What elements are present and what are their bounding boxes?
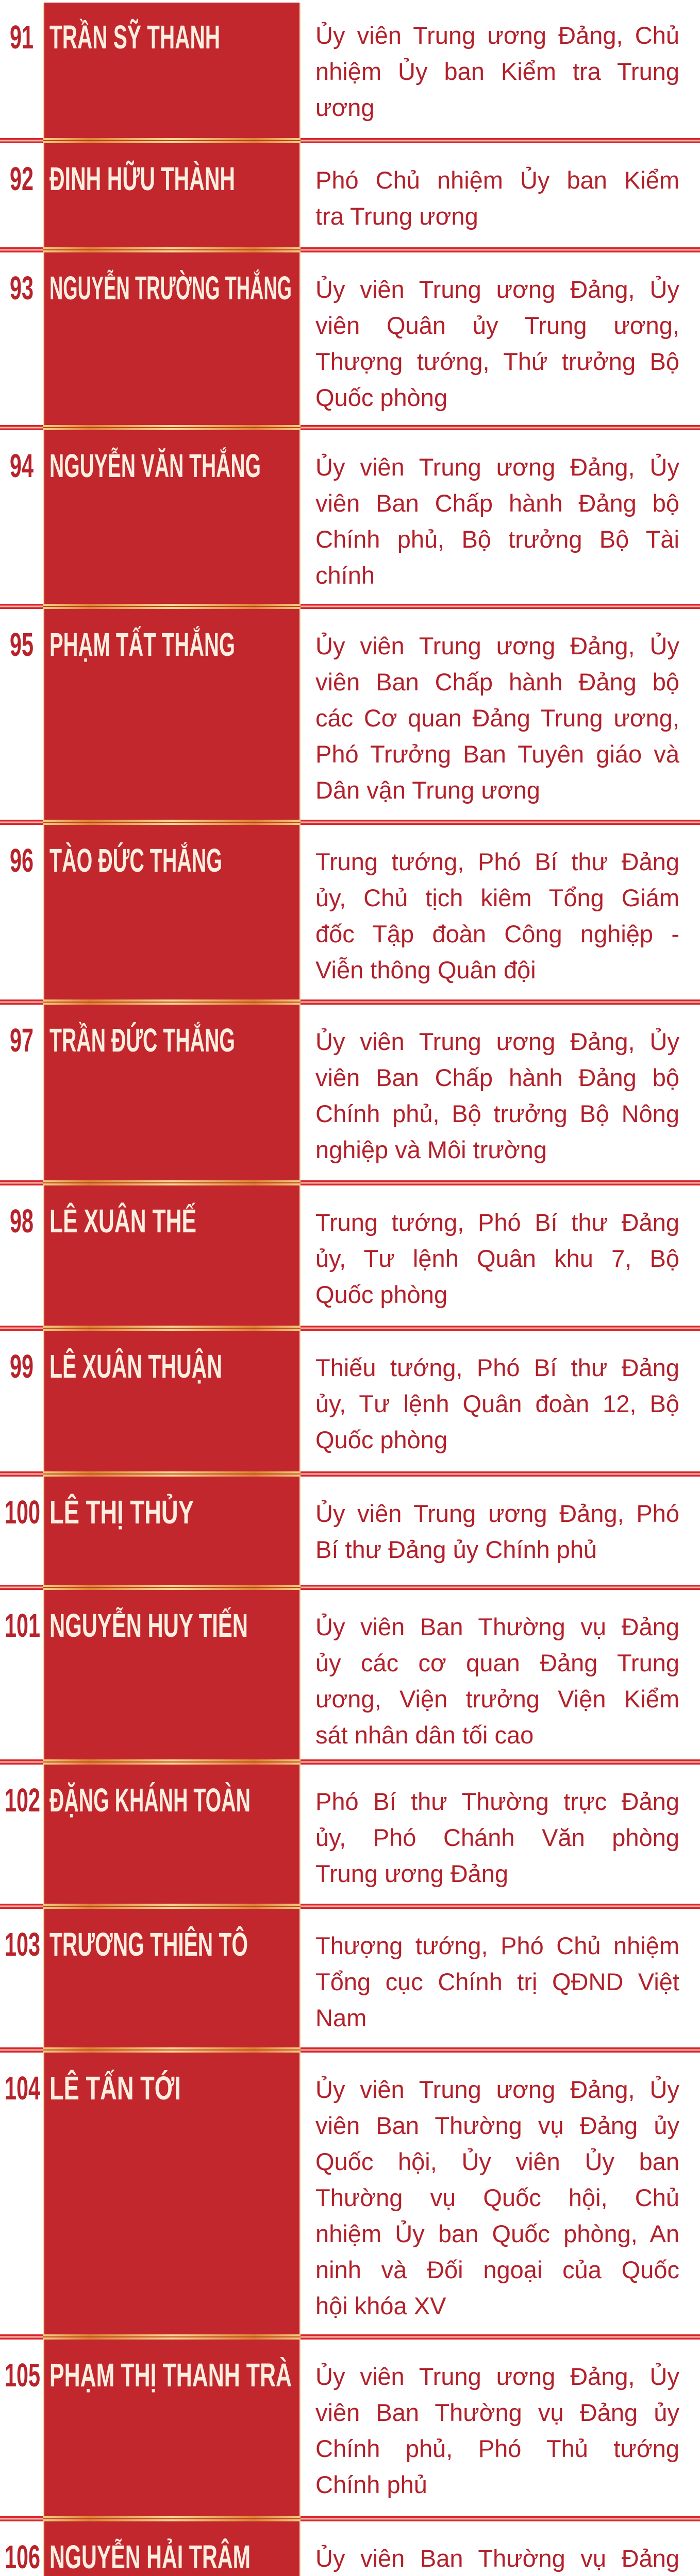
row 102: ủy, Phó Chánh Văn phòng	[315, 1824, 679, 1851]
row 106: Ủy viên Ban Thường vụ Đảng	[315, 2545, 679, 2572]
row 104: Ủy viên Trung ương Đảng, Ủy	[315, 2076, 679, 2103]
row 103	[5, 1925, 679, 2031]
row 105: Chính phủ, Phó Thủ tướng	[315, 2435, 679, 2462]
row 98: ủy, Tư lệnh Quân khu 7, Bộ	[315, 1245, 679, 1272]
row 95: Ủy viên Trung ương Đảng, Ủy	[315, 632, 679, 659]
row 94	[10, 447, 679, 589]
row 94: Ủy viên Trung ương Đảng, Ủy	[315, 453, 679, 481]
row 91: Ủy viên Trung ương Đảng, Chủ	[315, 22, 679, 49]
row 104	[5, 2069, 679, 2319]
row 105: viên Ban Thường vụ Đảng ủy	[315, 2399, 679, 2426]
row 97: nghiệp và Môi trường	[315, 1136, 547, 1163]
row 99: ủy, Tư lệnh Quân đoàn 12, Bộ	[315, 1390, 679, 1417]
row 104: hội khóa XV	[315, 2292, 446, 2319]
row 95: các Cơ quan Đảng Trung ương,	[315, 704, 679, 732]
red name column background	[43, 3, 301, 2576]
row 96: Viễn thông Quân đội	[315, 956, 536, 984]
row 104: ninh và Đối ngoại của Quốc	[315, 2256, 679, 2283]
row 94: chính	[315, 562, 375, 589]
row 93: Ủy viên Trung ương Đảng, Ủy	[315, 276, 679, 303]
row 99	[10, 1347, 679, 1453]
row 96: ủy, Chủ tịch kiêm Tổng Giám	[315, 884, 679, 911]
row 101: ủy các cơ quan Đảng Trung	[315, 1649, 679, 1676]
row 92: tra Trung ương	[315, 202, 478, 230]
row 96: Trung tướng, Phó Bí thư Đảng	[315, 848, 679, 875]
row 94: Chính phủ, Bộ trưởng Bộ Tài	[315, 526, 679, 553]
row 103: Tổng cục Chính trị QĐND Việt	[315, 1968, 679, 1995]
row 91: ương	[315, 94, 375, 121]
row 102: Phó Bí thư Thường trực Đảng	[315, 1788, 679, 1815]
row 101	[5, 1607, 679, 1749]
row 92: Phó Chủ nhiệm Ủy ban Kiểm	[315, 166, 679, 194]
row 95: Phó Trưởng Ban Tuyên giáo và	[315, 740, 679, 768]
row 94: viên Ban Chấp hành Đảng bộ	[315, 489, 679, 517]
row 93	[10, 269, 679, 411]
row 99: Thiếu tướng, Phó Bí thư Đảng	[315, 1354, 679, 1381]
row 97: Chính phủ, Bộ trưởng Bộ Nông	[315, 1100, 679, 1127]
row 98: Quốc phòng	[315, 1281, 447, 1308]
row 104: Thường vụ Quốc hội, Chủ	[315, 2184, 679, 2211]
row 96	[10, 841, 679, 984]
row 101: Ủy viên Ban Thường vụ Đảng	[315, 1613, 679, 1640]
row 102	[5, 1782, 679, 1887]
row 98	[10, 1202, 679, 1308]
row 100: Ủy viên Trung ương Đảng, Phó	[315, 1500, 679, 1527]
row 99: Quốc phòng	[315, 1426, 447, 1453]
row 93: Thượng tướng, Thứ trưởng Bộ	[315, 348, 679, 375]
row 96: đốc Tập đoàn Công nghiệp -	[315, 920, 679, 947]
row 104: viên Ban Thường vụ Đảng ủy	[315, 2112, 679, 2139]
row 91	[10, 19, 679, 121]
row 91: nhiệm Ủy ban Kiểm tra Trung	[315, 58, 679, 85]
row 101: ương, Viện trưởng Viện Kiểm	[315, 1685, 679, 1713]
row 101: sát nhân dân tối cao	[315, 1721, 534, 1749]
row 103: Nam	[315, 2004, 366, 2031]
row 97: Ủy viên Trung ương Đảng, Ủy	[315, 1028, 679, 1055]
row 95: Dân vận Trung ương	[315, 776, 540, 804]
row 97	[10, 1021, 679, 1163]
row 95	[10, 625, 679, 804]
row 103: Thượng tướng, Phó Chủ nhiệm	[315, 1932, 679, 1959]
row 98: LÊ XUÂN THẾ	[49, 1202, 196, 1240]
row 104: nhiệm Ủy ban Quốc phòng, An	[315, 2220, 679, 2247]
row 97: viên Ban Chấp hành Đảng bộ	[315, 1064, 679, 1091]
row 104: LÊ TẤN TỚI	[49, 2069, 181, 2107]
row 100: Bí thư Đảng ủy Chính phủ	[315, 1536, 597, 1563]
row 105: Chính phủ	[315, 2471, 427, 2498]
row 92	[10, 160, 679, 230]
row 93: Quốc phòng	[315, 384, 447, 411]
row 105: Ủy viên Trung ương Đảng, Ủy	[315, 2363, 679, 2390]
row 105	[5, 2357, 679, 2498]
row 106	[5, 2538, 679, 2575]
row 104: Quốc hội, Ủy viên Ủy ban	[315, 2148, 679, 2175]
row 100: LÊ THỊ THỦY	[49, 1493, 194, 1531]
row 102: Trung ương Đảng	[315, 1860, 508, 1887]
row 93: viên Quân ủy Trung ương,	[315, 312, 679, 339]
row 98: Trung tướng, Phó Bí thư Đảng	[315, 1209, 679, 1236]
row 100	[5, 1493, 679, 1563]
row 95: viên Ban Chấp hành Đảng bộ	[315, 668, 679, 696]
